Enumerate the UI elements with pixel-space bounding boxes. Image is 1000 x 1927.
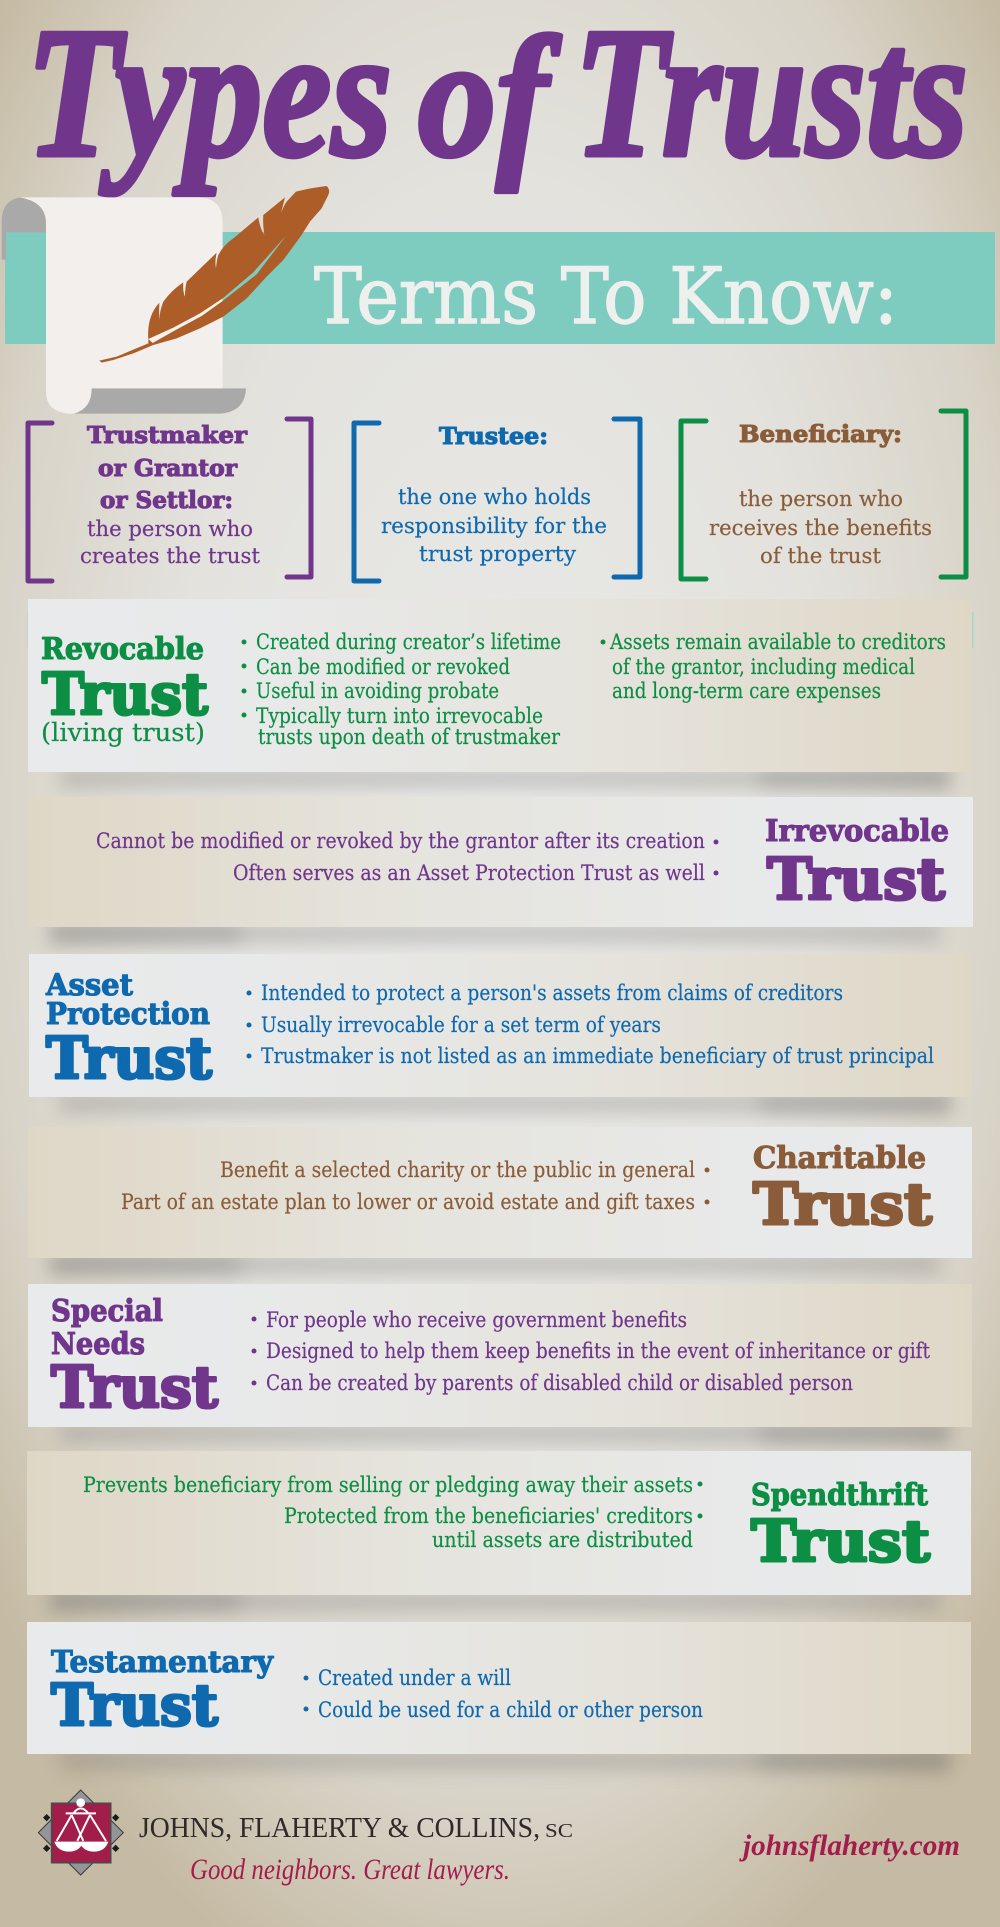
panel: asset protection trust: Usually irrevocable for a set term of years — [261, 1013, 661, 1037]
panel: testamentary trust: Trust — [51, 1672, 219, 1739]
term: trustmaker: Trustmaker — [87, 422, 248, 449]
panel: irrevocable trust: Trust — [767, 846, 946, 913]
panel: revocable trust: Assets remain available to creditors — [609, 630, 946, 654]
term: beneficiary: the person who — [739, 487, 903, 511]
panel: irrevocable trust: Often serves as an Asset Protection Trust as well — [233, 861, 705, 885]
term: beneficiary: receives the benefits — [709, 516, 932, 540]
panel: asset protection trust: Trust — [46, 1025, 213, 1092]
panel: special needs trust: Can be created by parents of disabled child or disabled person — [266, 1371, 853, 1395]
term: trustee: Trustee: — [439, 423, 548, 450]
term: trustee: the one who holds — [398, 485, 591, 509]
panel: charitable trust: Charitable — [753, 1141, 926, 1176]
firm name: JOHNS, FLAHERTY & COLLINS, — [139, 1813, 540, 1844]
icon: firm logo with scales — [38, 1790, 123, 1875]
panel: charitable trust: Benefit a selected charity or the public in general — [220, 1158, 695, 1182]
panel: spendthrift trust: Trust — [751, 1508, 931, 1575]
term: beneficiary — [681, 411, 966, 579]
panel: irrevocable trust: Cannot be modified or revoked by the grantor after its creation — [96, 829, 705, 853]
panel: irrevocable trust: Irrevocable — [765, 814, 949, 849]
panel: spendthrift trust: Spendthrift — [751, 1478, 928, 1513]
panel: special needs trust: Designed to help them keep benefits in the event of inheritance or gift — [266, 1339, 930, 1363]
panel: spendthrift trust — [27, 1451, 971, 1611]
panel: asset protection trust: Intended to protect a person's assets from claims of creditors — [261, 981, 843, 1005]
panel: revocable trust: Created during creator’s lifetime — [256, 630, 561, 654]
panel: testamentary trust: Created under a will — [318, 1666, 511, 1690]
term: trustee — [354, 419, 640, 581]
panel: revocable trust: Typically turn into irrevocable — [256, 704, 543, 728]
panel: revocable trust — [28, 599, 974, 788]
panel: revocable trust: and long-term care expenses — [612, 679, 881, 703]
icon: scroll — [2, 197, 246, 414]
panel: revocable trust: trusts upon death of trustmaker — [258, 725, 561, 749]
panel: charitable trust — [28, 1127, 972, 1274]
panel: revocable trust: Can be modified or revoked — [256, 655, 510, 679]
panel: irrevocable trust — [29, 797, 973, 943]
terms to know banner — [5, 232, 995, 344]
icon: feather quill — [99, 186, 329, 363]
panel: testamentary trust: Testamentary — [51, 1645, 275, 1680]
term: trustmaker: or Grantor — [98, 455, 238, 482]
term: beneficiary: Beneficiary: — [739, 421, 902, 448]
term: trustee: trust property — [419, 542, 576, 566]
panel: testamentary trust: Could be used for a child or other person — [318, 1698, 703, 1722]
panel: revocable trust: Revocable — [41, 632, 204, 667]
terms to know banner: Terms To Know: — [314, 252, 898, 342]
panel: charitable trust: Trust — [753, 1171, 933, 1238]
panel: asset protection trust: Protection — [46, 997, 210, 1032]
panel: special needs trust: Needs — [51, 1327, 145, 1362]
term: trustmaker: the person who — [87, 517, 253, 541]
panel: asset protection trust — [29, 954, 972, 1113]
website: johnsflaherty.com — [739, 1829, 960, 1862]
panel: special needs trust: Special — [51, 1294, 163, 1329]
panel: spendthrift trust: Protected from the beneficiaries' creditors — [284, 1504, 693, 1528]
panel: charitable trust: Part of an estate plan to lower or avoid estate and gift taxes — [121, 1190, 695, 1214]
panel: special needs trust: For people who receive government benefits — [266, 1308, 687, 1332]
panel: asset protection trust: Trustmaker is not listed as an immediate beneficiary of trust principal — [261, 1044, 934, 1068]
panel: revocable trust: Useful in avoiding probate — [256, 679, 499, 703]
term: trustmaker: creates the trust — [80, 544, 261, 568]
term: beneficiary: of the trust — [760, 544, 882, 568]
title — [26, 0, 968, 196]
title: of — [418, 3, 561, 193]
term: trustee: responsibility for the — [381, 514, 607, 538]
panel: spendthrift trust: until assets are distributed — [432, 1528, 693, 1552]
panel: testamentary trust — [27, 1622, 971, 1770]
term: trustmaker — [28, 419, 311, 581]
panel: special needs trust: Trust — [51, 1354, 219, 1421]
panel: revocable trust: Trust — [42, 661, 209, 728]
firm name: SC — [545, 1820, 573, 1842]
panel: spendthrift trust: Prevents beneficiary from selling or pledging away their assets — [83, 1473, 693, 1497]
term: trustmaker: or Settlor: — [100, 487, 233, 514]
panel: asset protection trust: Asset — [45, 968, 133, 1003]
tagline: Good neighbors. Great lawyers. — [190, 1853, 510, 1886]
panel: revocable trust: (living trust) — [41, 718, 205, 747]
panel: revocable trust: of the grantor, including medical — [612, 655, 915, 679]
panel: special needs trust — [28, 1284, 972, 1443]
